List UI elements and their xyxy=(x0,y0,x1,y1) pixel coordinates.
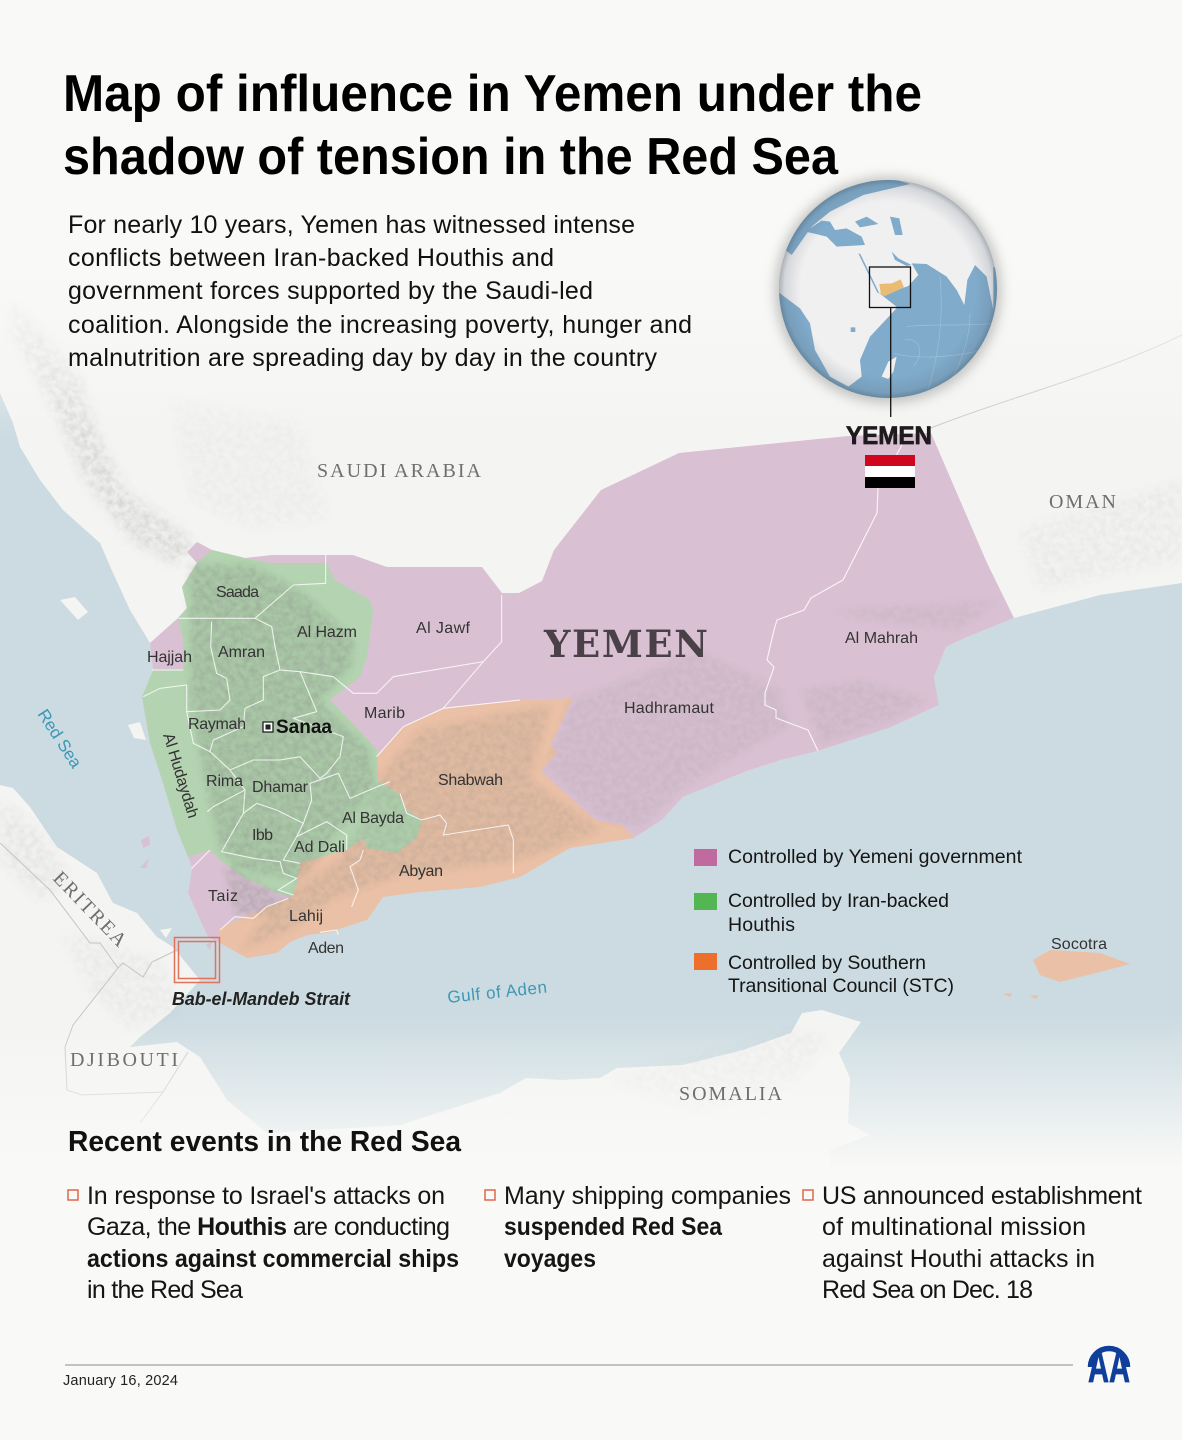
neighbouring country labels xyxy=(48,460,1116,1105)
intro text: coalition. Alongside the increasing poverty, hunger and xyxy=(68,311,692,339)
large Yemen label: YEMEN xyxy=(543,622,708,666)
globe: Madagascar xyxy=(882,357,897,379)
title: Map of influence in Yemen under the xyxy=(63,65,922,123)
event: US mission: against Houthi attacks in xyxy=(822,1245,1095,1273)
event: commercial ships xyxy=(68,1182,459,1304)
globe locator xyxy=(773,175,1013,417)
event: shipping companies: Many shipping companies xyxy=(504,1182,791,1210)
region: controlled by Southern Transitional Council xyxy=(220,698,634,958)
strait marker xyxy=(174,938,220,982)
governorate labels: Al Hazm xyxy=(297,624,357,641)
governorate labels: Al Mahrah xyxy=(845,630,918,647)
event: US mission: US announced establishment xyxy=(822,1182,1142,1210)
bottom fade overlay xyxy=(0,1015,1182,1185)
governorate labels: Hadhramaut xyxy=(624,700,715,717)
event: commercial ships: Gaza, the Houthis are conducting xyxy=(87,1213,450,1241)
legend: Controlled by Southern xyxy=(728,952,926,974)
governorate labels: Dhamar xyxy=(252,779,309,796)
intro text: For nearly 10 years, Yemen has witnessed intense xyxy=(68,211,635,239)
sea labels: Red Sea xyxy=(34,706,86,772)
governorate labels xyxy=(147,584,1107,957)
events heading: Recent events in the Red Sea xyxy=(68,1126,462,1158)
governorate labels: Ibb xyxy=(252,827,273,844)
event: US mission: of multinational mission xyxy=(822,1213,1086,1241)
legend: Controlled by Iran-backed xyxy=(728,890,949,912)
event: commercial ships: in the Red Sea xyxy=(87,1276,243,1304)
governorate labels: Ad Dali xyxy=(294,839,345,856)
intro text: malnutrition are spreading day by day in the country xyxy=(68,344,658,372)
governorate labels: Abyan xyxy=(399,863,443,880)
intro text: government forces supported by the Saudi-led xyxy=(68,277,593,305)
governorate labels: Al Hudaydah xyxy=(159,731,201,820)
event: shipping companies xyxy=(485,1182,791,1273)
title: shadow of tension in the Red Sea xyxy=(63,128,839,186)
governorate labels: Socotra xyxy=(1051,936,1107,953)
governorate labels: Hajjah xyxy=(147,649,192,666)
legend: Houthis xyxy=(728,914,795,936)
neighbouring country labels: OMAN xyxy=(1049,491,1116,513)
top fade overlay xyxy=(0,270,1182,440)
governorate labels: Shabwah xyxy=(438,772,503,789)
event: commercial ships: In response to Israel's attacks on xyxy=(87,1182,445,1210)
icon: Yemen flag xyxy=(865,455,915,488)
legend: Transitional Council (STC) xyxy=(728,975,954,997)
footer rule xyxy=(65,1364,1073,1366)
base map: land and sea xyxy=(0,270,1182,1175)
legend: Controlled by Yemeni government xyxy=(728,846,1023,868)
governorate labels: Marib xyxy=(364,705,405,722)
strait label: Bab-el-Mandeb Strait xyxy=(172,989,351,1009)
globe: Yemen highlight xyxy=(879,279,904,296)
sea labels: Gulf of Aden xyxy=(446,978,548,1007)
region: controlled by Iran-backed Houthis xyxy=(142,550,422,897)
border: Hadhramaut and Al Mahrah xyxy=(765,445,902,751)
event: US mission xyxy=(803,1182,1142,1304)
region: controlled by Yemeni government xyxy=(142,433,1014,958)
socotra and islands xyxy=(140,836,1130,999)
capital marker: Sanaa: Sanaa xyxy=(276,717,332,738)
governorate labels: Al Jawf xyxy=(416,620,471,637)
governorate labels: Rima xyxy=(206,773,243,790)
intro text: conflicts between Iran-backed Houthis and xyxy=(68,244,554,272)
country label: YEMEN xyxy=(846,422,932,450)
governorate labels: Raymah xyxy=(188,716,246,733)
yemen territory map xyxy=(120,433,1040,970)
event: shipping companies: suspended Red Sea xyxy=(504,1213,723,1241)
globe: ocean grid xyxy=(893,277,993,393)
governorate borders xyxy=(143,555,520,935)
neighbouring country labels: SAUDI ARABIA xyxy=(317,460,482,482)
neighbouring country labels: SOMALIA xyxy=(679,1083,783,1105)
governorate labels: Taiz xyxy=(208,888,238,905)
governorate labels: Saada xyxy=(216,584,259,601)
event: shipping companies: voyages xyxy=(504,1245,596,1273)
governorate labels: Amran xyxy=(218,644,265,661)
neighbouring country labels: DJIBOUTI xyxy=(70,1049,178,1071)
event: commercial ships: actions against commercial ships xyxy=(87,1245,459,1273)
icon: AA logo xyxy=(1088,1341,1130,1392)
title xyxy=(63,65,922,186)
sea labels xyxy=(34,706,548,1007)
neighbouring country labels: ERITREA xyxy=(48,867,131,952)
governorate labels: Lahij xyxy=(289,908,323,925)
event: US mission: Red Sea on Dec. 18 xyxy=(822,1276,1033,1304)
icon: AA logo: AA xyxy=(1088,1341,1130,1392)
date: January 16, 2024 xyxy=(63,1373,178,1389)
globe: northern seas xyxy=(777,175,912,332)
globe: Indian Ocean and Atlantic xyxy=(779,263,997,398)
governorate labels: Al Bayda xyxy=(342,810,404,827)
legend xyxy=(694,846,1023,997)
intro text xyxy=(68,211,692,372)
governorate labels: Aden xyxy=(308,940,344,957)
